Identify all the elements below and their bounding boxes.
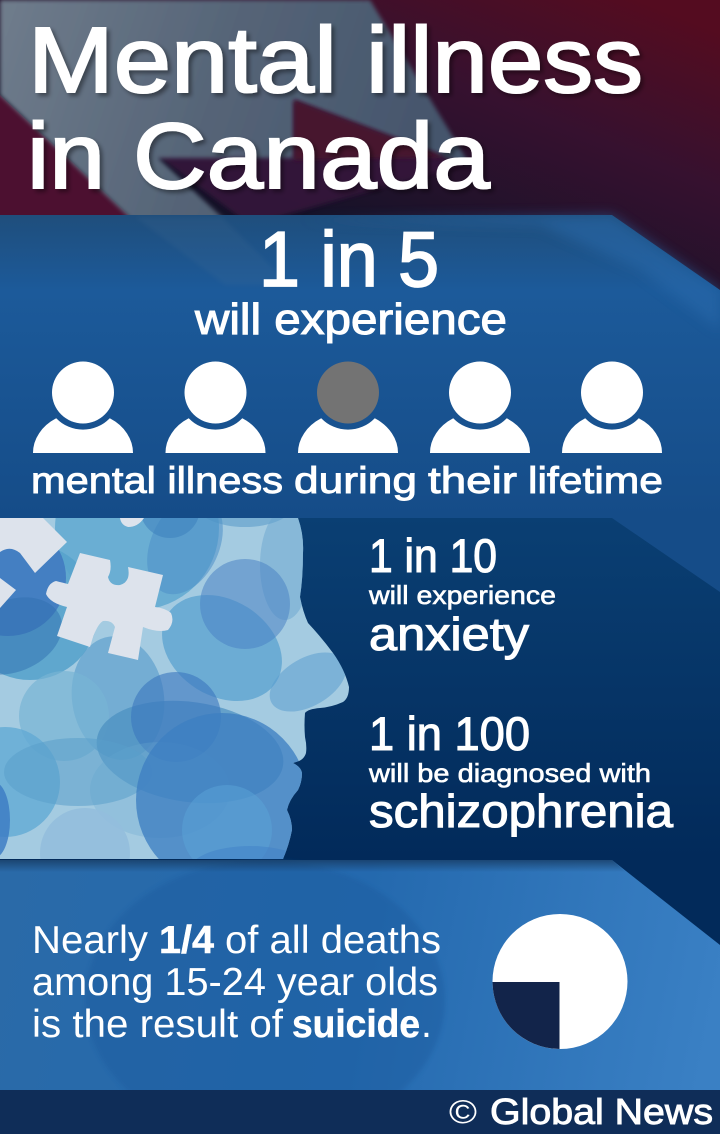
icon: puzzle piece left edge (0, 578, 16, 608)
stat: 1 in 100 schizophrenia: schizophrenia (369, 785, 673, 837)
icon: puzzle piece centre (46, 553, 172, 660)
text: will experience: will experience (194, 295, 507, 344)
text: suicide statistic (32, 919, 441, 1046)
credit: Global News: © (449, 1093, 477, 1130)
panel: suicide background (0, 860, 720, 1134)
footer bar (0, 1090, 720, 1134)
icon: person 3 highlighted grey (298, 362, 398, 453)
icon: puzzle piece top left (0, 518, 67, 573)
top background (0, 0, 720, 300)
title (27, 8, 643, 208)
text: suicide statistic: is the result of (32, 1003, 283, 1046)
stat: 1 in 10 anxiety: 1 in 10 (369, 529, 497, 582)
text: mental illness during their lifetime: mental illness (31, 460, 283, 501)
icon: person 5 (562, 362, 662, 453)
text: mental illness during their lifetime: their (428, 460, 517, 501)
stat: 1 in 100 schizophrenia (368, 707, 673, 837)
text: mental illness during their lifetime: during (294, 460, 417, 501)
text: mental illness during their lifetime: lifetime (528, 460, 663, 501)
panel: 1 in 5 background (0, 215, 720, 620)
icon row: five people, one highlighted (33, 362, 662, 453)
icon: puzzle tab (120, 518, 144, 527)
illustration: head silhouette with circles and puzzle pieces (0, 518, 349, 859)
icon: person 4 (430, 362, 530, 453)
text: suicide statistic: 1/4 (159, 919, 214, 962)
title: in (27, 104, 105, 208)
panel: anxiety and schizophrenia background (0, 518, 720, 960)
heading: 1 in 5: 1 in 5 (259, 215, 439, 303)
stat: 1 in 100 schizophrenia: will be diagnosed with (368, 758, 651, 788)
text: suicide statistic: suicide (292, 1003, 420, 1046)
title: illness (366, 8, 643, 112)
stat: 1 in 10 anxiety (368, 529, 556, 660)
stat: 1 in 100 schizophrenia: 1 in 100 (369, 707, 530, 760)
credit: Global News: Global News (490, 1091, 713, 1132)
text: suicide statistic: . (421, 1003, 432, 1046)
icon: person 2 (165, 362, 266, 453)
title: Canada (133, 104, 490, 208)
text: suicide statistic: among 15-24 year olds (32, 961, 438, 1004)
text: suicide statistic: of all deaths (225, 919, 441, 962)
pie chart: one quarter (492, 914, 628, 1049)
text: mental illness during their lifetime (31, 460, 663, 501)
stat: 1 in 10 anxiety: will experience (368, 580, 556, 610)
icon: person 1 (33, 362, 133, 453)
text: suicide statistic: Nearly (32, 919, 149, 962)
title: Mental (28, 8, 337, 112)
stat: 1 in 10 anxiety: anxiety (369, 608, 529, 660)
